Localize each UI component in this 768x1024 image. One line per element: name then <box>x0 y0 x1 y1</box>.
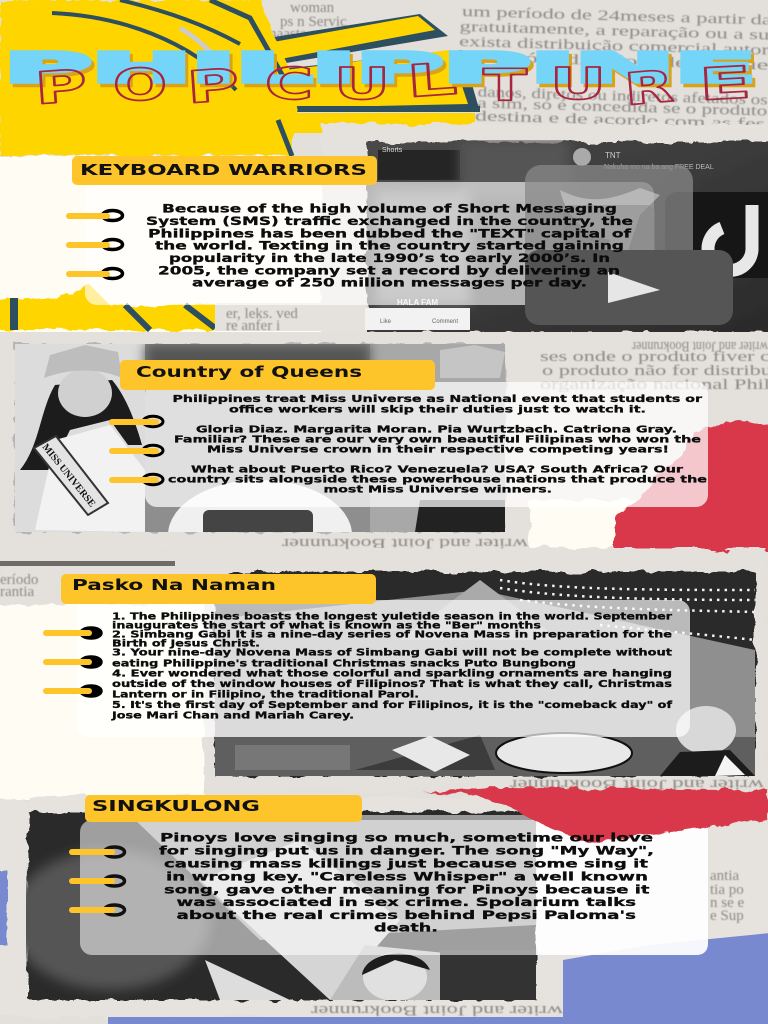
icon: twitter <box>525 165 693 305</box>
title: pop culture: P <box>185 59 241 114</box>
newspaper text right: section 4: tia po <box>710 882 744 898</box>
text block: singkulong: death. <box>374 921 438 935</box>
title: philippine: PHILIPPINE <box>7 48 759 96</box>
cream paper: section 3 left <box>0 604 204 800</box>
text block: country of queens: Gloria Diaz. Margarita Moran. Pia Wurtzbach. Catriona Gray. <box>196 424 677 435</box>
text block: pasko na naman: inaugurates the start of what is known as the "Ber" months <box>112 621 541 632</box>
text block: keyboard warriors: Philippines has been dubbed the "TEXT" capital of <box>148 226 632 240</box>
photo collage: miss universe <box>12 342 508 534</box>
newspaper text top right: exista distribuição comercial autor <box>459 34 768 59</box>
yellow sun fragment lower left <box>0 285 225 330</box>
text block: pasko na naman: 1. The Philippines boasts the longest yuletide season in the world. September <box>112 611 672 622</box>
upside-down newspaper text under christmas: writer and Joint Bookrunner <box>510 776 764 792</box>
icon: chat bubble <box>563 205 655 290</box>
text block: pasko na naman: eating Philippine's traditional Christmas snacks Puto Bungbong <box>112 659 576 670</box>
text block: keyboard warriors <box>146 202 633 290</box>
cream torn paper: keyboard warriors section <box>0 124 768 335</box>
title: philippine <box>4 44 759 96</box>
newspaper text right: section 4 <box>710 868 744 924</box>
text block: keyboard warriors: Because of the high volume of Short Messaging <box>162 202 617 216</box>
newspaper text top right: a sim, só é concedida se o produto <box>477 96 768 120</box>
newspaper text right: section 4: antia <box>710 868 739 884</box>
heading: keyboard warriors <box>72 156 377 185</box>
social media content: Comment <box>432 319 458 325</box>
title: pop culture: O <box>113 60 167 111</box>
text block: country of queens: Familiar? These are our very own beautiful Filipinas who won the <box>174 434 701 445</box>
text block: singkulong: Pinoys love singing so much, sometime our love <box>160 831 653 845</box>
heading: pasko na naman: Pasko Na Naman <box>72 576 276 594</box>
text block: country of queens: Miss Universe crown in their respective competing years! <box>207 445 669 456</box>
bullet rings: pasko na naman <box>43 628 101 696</box>
text panel: singkulong <box>80 820 708 955</box>
heading: singkulong: SINGKULONG <box>92 797 260 815</box>
newspaper background: section 3: rantia <box>0 584 34 600</box>
heading: country of queens <box>120 360 435 390</box>
red torn paper top <box>424 787 768 843</box>
heading: country of queens: Country of Queens <box>136 363 362 381</box>
red torn paper: right <box>615 422 768 553</box>
social media content: Nakuha mo na ba ang FREE DEAL <box>604 164 714 171</box>
text block: keyboard warriors: popularity in the late 1990’s to early 2000’s. In <box>169 251 610 265</box>
heading: singkulong <box>85 795 362 822</box>
text block: singkulong: for singing put us in danger. The song "My Way", <box>159 844 654 858</box>
text block: singkulong: was associated in sex crime. Spolarium talks <box>176 895 636 909</box>
bullet rings: country of queens <box>109 416 163 485</box>
newspaper background: section 3: eríodo <box>0 572 38 588</box>
title: pop culture: R <box>623 61 676 116</box>
newspaper background: section 2: writer and Joint Bookrunner <box>632 338 768 354</box>
title: philippine: PHILIPPINE <box>4 44 756 92</box>
sun graphic: yellow sun with dark rays <box>0 0 480 156</box>
cream paper patch right of queens <box>530 500 730 548</box>
bullet rings: singkulong <box>69 847 124 915</box>
upside-down newspaper text bottom: writer and Joint Bookrunner <box>311 1002 563 1018</box>
text block: pasko na naman: 5. It's the first day of September and for Filipinos, it is the "comeback day" of <box>112 700 673 711</box>
text block: pasko na naman: Lantern or in Filipino, the traditional Parol. <box>112 690 419 701</box>
text block: pasko na naman: 2. Simbang Gabi It is a nine-day series of Novena Mass in preparation for the <box>112 629 672 640</box>
text block: singkulong <box>159 831 654 935</box>
newspaper background: section 2 <box>0 332 768 550</box>
title: pop culture: P <box>33 60 89 115</box>
text block: keyboard warriors: System (SMS) traffic exchanged in the country, the <box>146 214 633 228</box>
title: pop culture <box>33 54 753 116</box>
blue torn paper bottom right <box>108 932 768 1024</box>
text block: pasko na naman: outside of the window houses of Filipinos? That is what they call, Christmas <box>112 679 672 690</box>
photo collage: singkulong <box>10 812 536 1001</box>
newspaper fragment lower: re anfer i <box>226 318 280 334</box>
heading: keyboard warriors: KEYBOARD WARRIORS <box>80 161 367 179</box>
social media content: Like <box>380 319 392 325</box>
text block: country of queens <box>168 394 707 496</box>
text block: keyboard warriors: 2005, the company set a record by delivering an <box>158 263 620 277</box>
newspaper text top middle: ps n Servic <box>280 14 347 30</box>
text block: country of queens: country sits alongside these powerhouse nations that produce the <box>168 474 707 485</box>
newspaper text right: section 4: e Sup <box>710 908 744 924</box>
newspaper fragment lower <box>215 303 325 334</box>
newspaper text top middle <box>265 0 347 42</box>
text block: country of queens: office workers will skip their duties just to watch it. <box>229 404 646 415</box>
text block: country of queens: Philippines treat Miss Universe as National event that students or <box>172 394 702 405</box>
title: pop culture: C <box>265 59 313 110</box>
paper background: section 4 <box>0 797 768 1017</box>
upside-down newspaper text under queens: writer and Joint Bookrunner <box>282 535 528 551</box>
newspaper background: section 2: organização nacional Phil <box>540 377 768 393</box>
social media content: Shorts <box>382 147 403 154</box>
photo collage: christmas <box>205 572 755 777</box>
newspaper text right: section 4: n se e <box>710 895 744 911</box>
title: pop culture: U <box>334 59 390 110</box>
newspaper text top middle: maasta a <box>265 26 317 42</box>
bullet rings: keyboard warriors <box>66 210 122 278</box>
icon: tiktok <box>665 192 768 278</box>
newspaper text top right: gratuitamente, a reparação ou a su <box>459 19 768 44</box>
newspaper text top right: um período de 24meses a partir da <box>462 4 768 29</box>
social media content: HALA FAM <box>397 298 438 307</box>
newspaper background: section 2: o produto não for distribu <box>542 363 768 379</box>
title: pop culture: L <box>405 54 459 108</box>
newspaper text top right: danos, diretos ou indiretos afetados os <box>477 85 768 109</box>
heading: pasko na naman <box>61 574 376 604</box>
icon: youtube <box>525 250 733 325</box>
text block: singkulong: in wrong key. "Careless Whisper" a well known <box>166 869 648 883</box>
text block: pasko na naman <box>111 611 673 721</box>
text block: pasko na naman: 4. Ever wondered what those colorful and sparkling ornaments are hanging <box>112 669 672 680</box>
newspaper background: section 3 <box>0 550 768 790</box>
text block: keyboard warriors: the world. Texting in the country started gaining <box>155 239 624 253</box>
text block: singkulong: causing mass killings just because some sing it <box>164 857 649 871</box>
newspaper text top right: destina e de acordo com as fes <box>475 108 765 133</box>
text block: pasko na naman: Jose Mari Chan and Mariah Carey. <box>111 710 354 721</box>
text block: country of queens: What about Puerto Rico? Venezuela? USA? South Africa? Our <box>191 464 683 475</box>
newspaper background: section 2: ses onde o produto fiver c <box>540 349 768 365</box>
social media content <box>352 140 714 332</box>
text panel: pasko na naman <box>77 600 690 737</box>
blue torn paper left <box>0 870 7 945</box>
title: pop culture: E <box>698 57 753 111</box>
title: pop culture: T <box>483 60 527 111</box>
text panel: keyboard warriors <box>85 182 654 305</box>
text block: pasko na naman: Birth of Jesus Christ. <box>112 638 260 649</box>
text panel: country of queens <box>145 382 708 507</box>
newspaper text top middle: woman <box>290 0 335 16</box>
text block: keyboard warriors: average of 250 million messages per day. <box>192 276 587 290</box>
newspaper text top right: adiantó indicados, desde que <box>458 49 768 74</box>
photo collage: miss universe: MISS UNIVERSE <box>40 442 98 510</box>
newspaper text top right <box>457 4 768 133</box>
newspaper fragment lower: er, leks. ved <box>226 306 298 322</box>
social media content: TNT <box>605 151 621 160</box>
photo collage: social media screenshots <box>367 142 768 332</box>
text block: singkulong: song, gave other meaning for Pinoys because it <box>164 882 650 896</box>
title: pop culture: U <box>550 59 606 110</box>
text block: country of queens: most Miss Universe winners. <box>324 485 552 496</box>
text block: pasko na naman: 3. Your nine-day Novena Mass of Simbang Gabi will not be complete without <box>112 648 673 659</box>
text block: singkulong: about the real crimes behind Pepsi Paloma's <box>176 908 636 922</box>
